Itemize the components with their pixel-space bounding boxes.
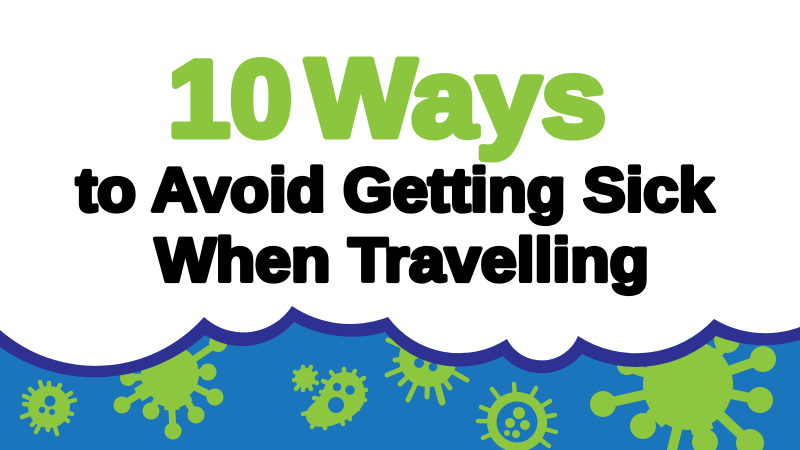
germ: bean-shaped bacterium — [303, 369, 366, 428]
subtitle: to Avoid Getting Sick: to Avoid Getting Sick — [76, 156, 714, 224]
germ: spiky microbe under the cloud — [387, 329, 467, 402]
title: 10 Ways: 10 — [168, 38, 292, 159]
germ: round spiky with three holes — [22, 382, 75, 434]
title: 10 Ways: Ways — [306, 37, 606, 160]
germ: large virus right — [590, 327, 776, 450]
title: 10 Ways — [168, 37, 606, 160]
germ: ring cell with inner dots — [478, 384, 556, 450]
blue background band — [0, 300, 800, 450]
germ: small spiky — [294, 367, 317, 390]
germ: large virus left — [114, 334, 227, 440]
subtitle: When Travelling: When Travelling — [155, 226, 649, 294]
